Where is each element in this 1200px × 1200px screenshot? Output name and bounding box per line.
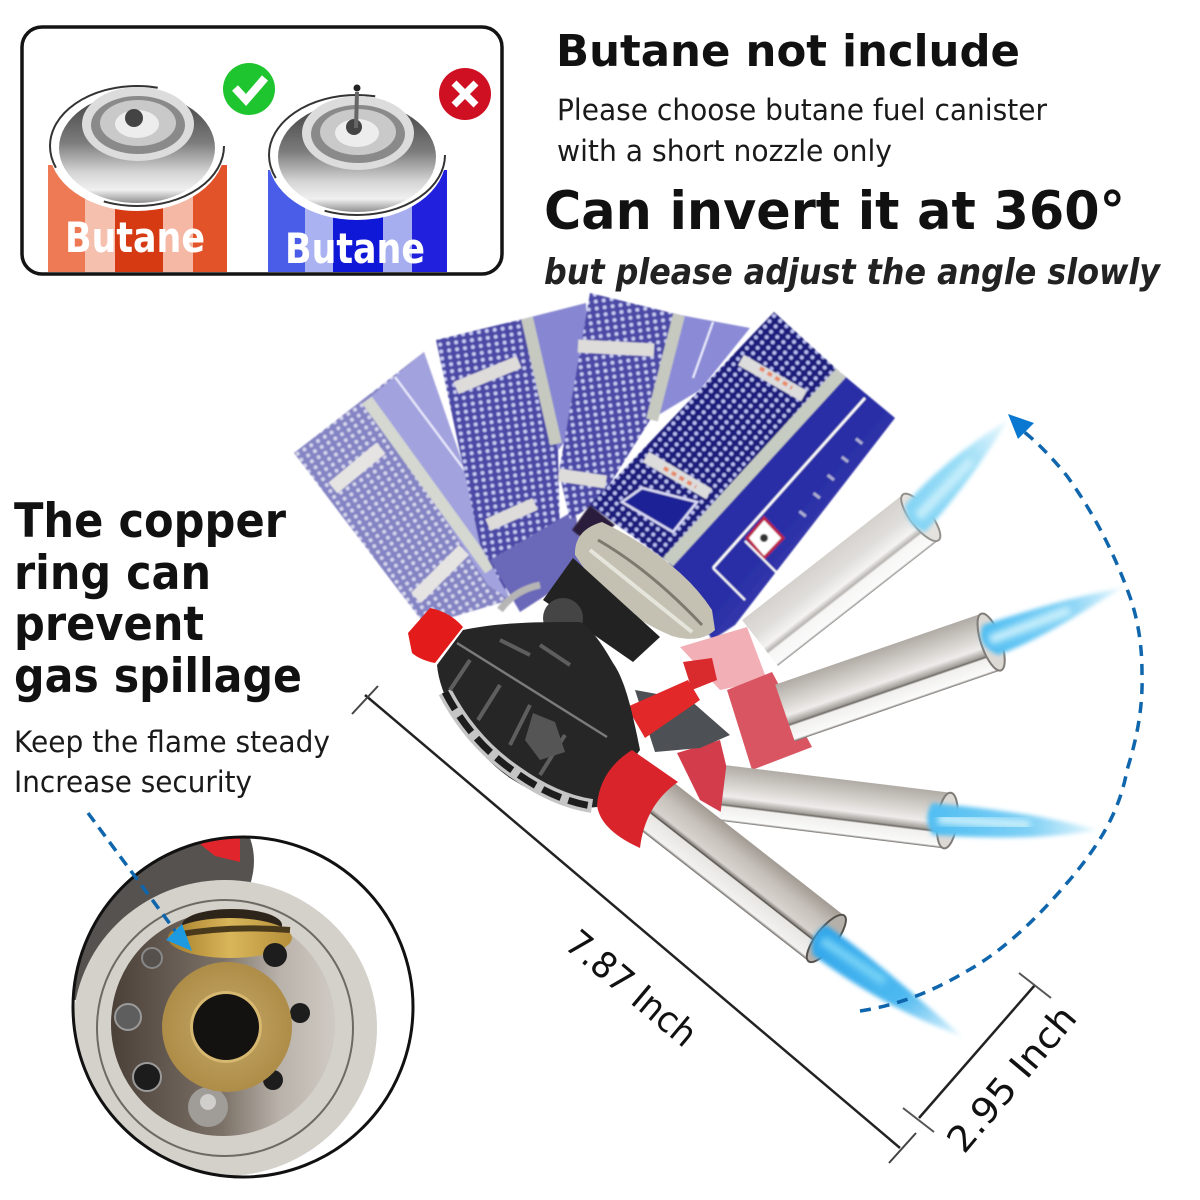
inset: copper ring close-up	[60, 836, 413, 1177]
grenade body	[437, 622, 640, 808]
dimension: width: 2.95 Inch	[939, 998, 1085, 1161]
canister silver rim	[575, 522, 715, 639]
canister: correct short nozzle: Butane	[65, 213, 205, 262]
heading: copper ring: gas spillage	[14, 649, 302, 704]
heading: copper ring: prevent	[14, 597, 204, 652]
text block: canister advice: with a short nozzle only	[557, 134, 892, 168]
tube B	[775, 610, 1010, 741]
red ring	[597, 750, 678, 848]
faded canister left	[294, 352, 510, 625]
heading: invert at 360: Can invert it at 360°	[544, 181, 1125, 242]
text block: flame steady: Keep the flame steady	[14, 725, 330, 759]
arrow: to copper ring	[88, 813, 192, 951]
neck	[543, 558, 660, 662]
heading: copper ring: The copper	[14, 494, 287, 549]
heading: butane not include: Butane not include	[556, 26, 1020, 77]
text block: canister advice: Please choose butane fuel canister	[557, 93, 1047, 127]
dimension: length: 7.87 Inch	[557, 922, 705, 1055]
heading: copper ring	[14, 494, 302, 704]
icon: green check	[223, 63, 275, 115]
panel: butane canister comparison	[22, 27, 502, 274]
canister: wrong long nozzle	[268, 84, 447, 273]
flame A	[905, 420, 1008, 532]
text block: flame steady: Increase security	[14, 765, 252, 799]
main blue canister	[572, 312, 895, 640]
faded canister middle	[436, 303, 592, 612]
faded canister right	[559, 293, 750, 520]
text block: flame steady	[14, 725, 330, 799]
canister: wrong long nozzle: Butane	[285, 224, 425, 273]
tube A	[742, 488, 946, 666]
upper tube positions	[720, 420, 1122, 850]
dimension: length	[352, 686, 916, 1163]
main tube	[635, 780, 852, 967]
heading: copper ring: ring can	[14, 546, 211, 601]
main flame	[812, 925, 962, 1036]
translucent positions of red collar	[677, 627, 812, 823]
tube C	[720, 765, 961, 850]
flame C	[927, 803, 1097, 837]
text block: canister advice	[557, 93, 1047, 168]
red knob	[408, 608, 463, 663]
rotation arc arrow	[860, 414, 1142, 1011]
faded canisters	[294, 293, 750, 625]
valve lever	[627, 658, 730, 752]
canister: correct short nozzle	[48, 85, 227, 272]
flame B	[981, 588, 1122, 655]
dimension: width	[903, 973, 1085, 1161]
torch head	[408, 558, 730, 808]
icon: red cross	[439, 68, 491, 120]
